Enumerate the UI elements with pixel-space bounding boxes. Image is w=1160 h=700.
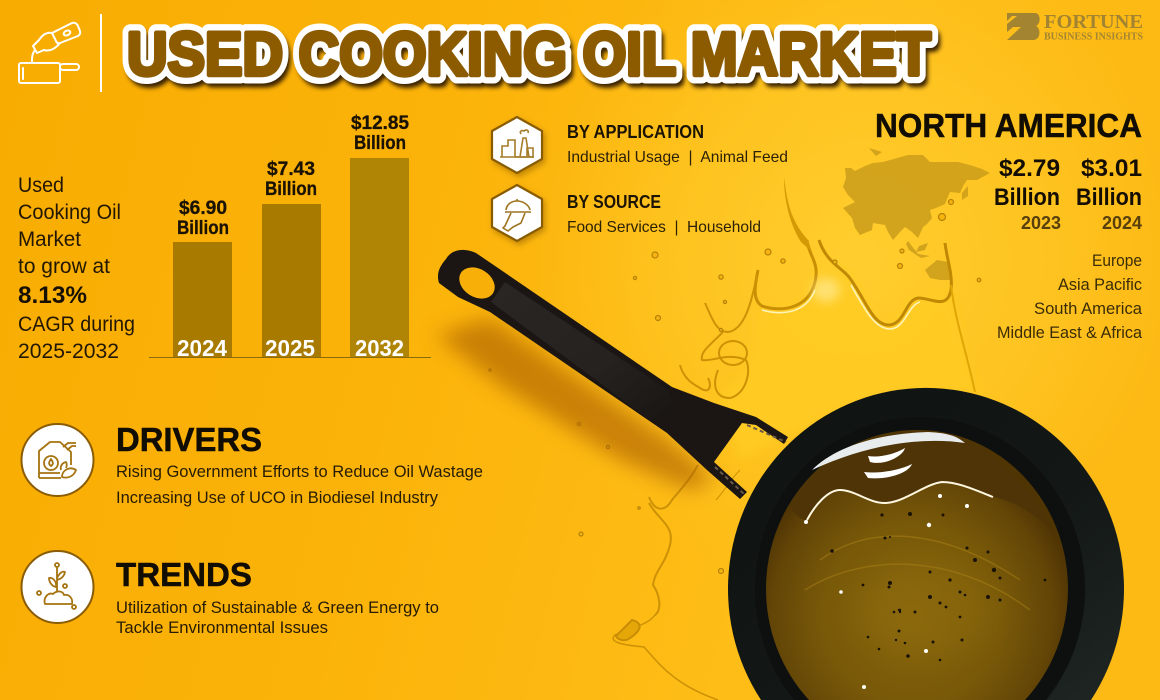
drivers: Increasing Use of UCO in Biodiesel Industry (116, 488, 438, 507)
other regions list (997, 252, 1143, 342)
frying pan with oil (728, 388, 1124, 700)
icon: by application factory hexagon (492, 117, 542, 173)
other regions list: South America (1034, 300, 1143, 318)
north america values: $2.79 (999, 155, 1060, 182)
bar chart: $6.90 (179, 198, 227, 219)
bar chart: $7.43 (267, 159, 315, 180)
trends (116, 556, 439, 637)
bar chart: 2025 (265, 335, 315, 361)
frying pan handle (438, 250, 788, 499)
logo: Fortune Business Insights (1007, 11, 1143, 42)
market growth text: to grow at (18, 255, 110, 278)
by application text: BY APPLICATION (567, 122, 704, 142)
drivers: DRIVERS (116, 421, 262, 458)
north america values: 2024 (1102, 213, 1142, 233)
logo: Fortune Business Insights: FORTUNE (1044, 11, 1143, 33)
north america values: 2023 (1021, 213, 1061, 233)
icon: trends plant sprout (22, 551, 94, 623)
oil drips and rings (613, 275, 757, 700)
by source text (567, 192, 761, 236)
other regions list: Middle East & Africa (997, 324, 1143, 342)
bar chart: $12.85 (351, 113, 409, 134)
icon: by source serving hand hexagon (492, 185, 542, 241)
market growth text: Used (18, 174, 64, 197)
bar chart (149, 113, 431, 361)
north america values (994, 155, 1142, 233)
market growth text: 8.13% (18, 282, 87, 309)
by source text: Food Services | Household (567, 219, 761, 236)
market growth text: Market (18, 228, 81, 251)
market growth text: 2025-2032 (18, 340, 119, 363)
oil spill upper (720, 178, 975, 460)
by source text: BY SOURCE (567, 192, 661, 212)
trends: Tackle Environmental Issues (116, 618, 328, 637)
market growth text: CAGR during (18, 313, 135, 336)
bar chart: Billion (265, 179, 317, 200)
market growth text: Cooking Oil (18, 201, 121, 224)
drivers (116, 421, 483, 507)
bar chart: Billion (354, 133, 406, 154)
by application text (567, 122, 788, 166)
north america values: Billion (994, 184, 1060, 211)
header divider (100, 14, 102, 92)
market growth text (18, 174, 135, 363)
bar chart: 2032 (355, 335, 404, 361)
other regions list: Asia Pacific (1058, 276, 1142, 294)
trends: Utilization of Sustainable & Green Energy to (116, 598, 439, 617)
title: USED COOKING OIL MARKET (127, 20, 931, 88)
bar chart: Billion (177, 218, 229, 239)
shadow of pan and handle (436, 318, 715, 490)
icon: drivers fuel can with leaf (22, 424, 94, 496)
north america heading: NORTH AMERICA (875, 107, 1142, 144)
world map: Asia Pacific (843, 148, 990, 280)
droplets (489, 200, 981, 574)
north america values: $3.01 (1081, 155, 1142, 182)
by application text: Industrial Usage | Animal Feed (567, 149, 788, 166)
bar chart: 2024 (177, 335, 227, 361)
drivers: Rising Government Efforts to Reduce Oil Wastage (116, 462, 483, 481)
icon: oil bottle pouring into pot (19, 23, 80, 83)
title: USED COOKING OIL MARKET (127, 20, 931, 88)
logo: Fortune Business Insights: BUSINESS INSIGHTS (1044, 32, 1143, 42)
north america values: Billion (1076, 184, 1142, 211)
trends: TRENDS (116, 556, 252, 593)
title: USED COOKING OIL MARKET (130, 25, 934, 93)
other regions list: Europe (1092, 252, 1142, 270)
